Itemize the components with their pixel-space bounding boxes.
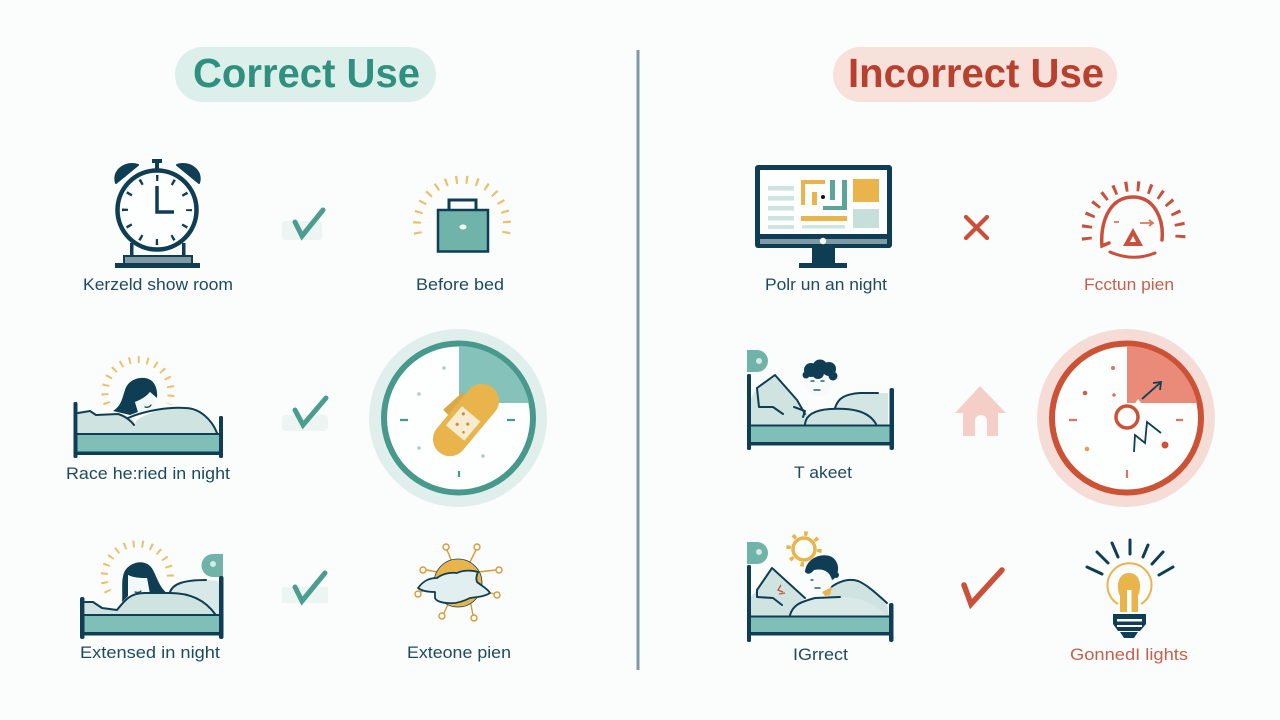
icon: alarm clock [115,159,200,268]
icon: briefcase with rays [417,180,507,252]
label: Extensed in night: Extensed in night [80,644,220,662]
icon: red pain gauge [1086,186,1180,257]
icon: computer monitor [755,165,892,268]
label: Race he:ried in night: Race he:ried in night [66,465,230,483]
heading: Incorrect Use: Incorrect Use [848,50,1104,96]
icon: restless person in bed [747,350,894,450]
label: Before bed: Before bed [416,276,504,294]
panel: incorrect use [747,47,1215,664]
label: IGrrect: IGrrect [793,646,848,664]
icon: person in bed with lamp [80,544,224,639]
label: Exteone pien: Exteone pien [407,644,511,662]
icon: red check mark [964,570,1002,604]
icon: person in bed with sun [747,534,894,642]
icon: red cross [966,217,987,238]
chart: clock dial with bandage [369,329,547,507]
label: Gonnedl lights: GonnedI lights [1070,646,1188,664]
label: Polr un an night: Polr un an night [765,276,887,294]
icon: person sleeping in bed [74,360,223,458]
icon: light bulb [1087,540,1173,638]
panel: correct use [66,47,547,662]
icon: bandage [420,372,506,463]
icon: germ with cloud [415,544,502,621]
label: T akeet: T akeet [794,464,852,482]
icon: check mark row 2 [282,398,328,431]
label: Fcctun pien: Fcctun pien [1084,276,1174,294]
icon: check mark row 1 [282,210,323,240]
chart: red clock dial [1037,329,1215,507]
label: Kerzeld show room: Kerzeld show room [83,276,233,294]
icon: check mark row 3 [282,573,328,603]
heading: Correct Use: Correct Use [193,50,420,96]
icon: pink house [955,386,1006,436]
